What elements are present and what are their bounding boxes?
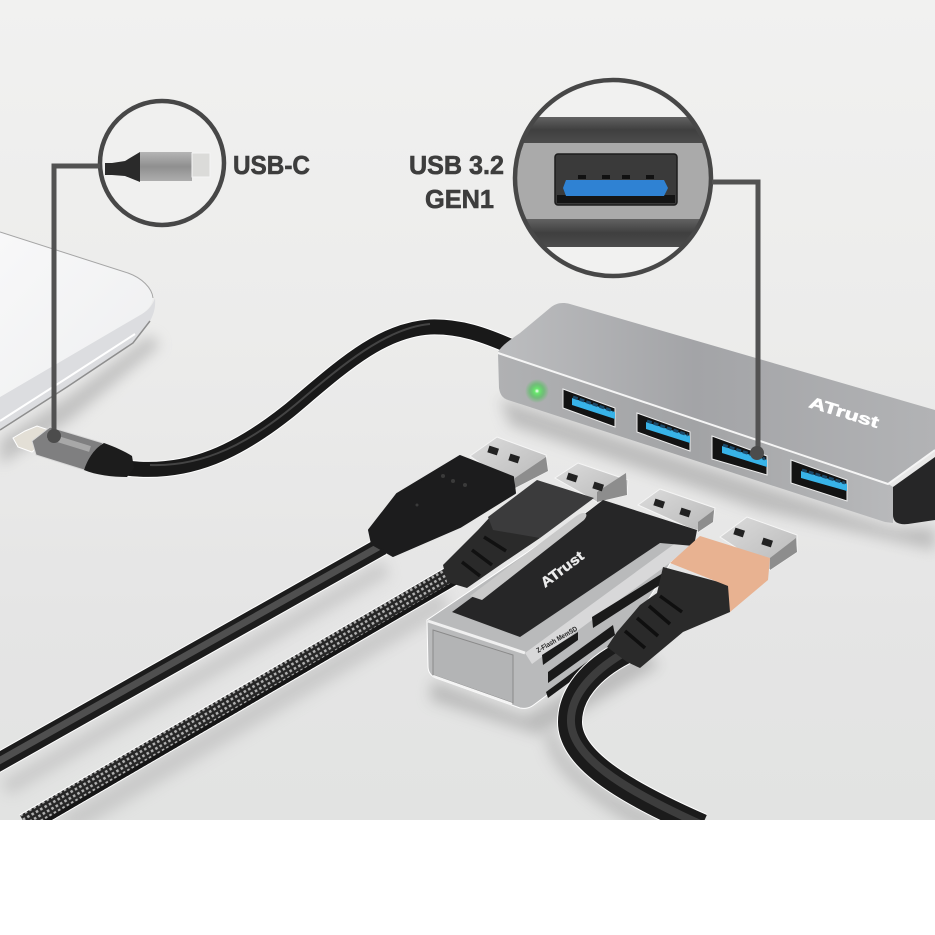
lens connector: [105, 152, 210, 182]
reader side strip: [525, 542, 690, 664]
callout: USB 3.2 lens: [512, 78, 714, 278]
hub port 2: [637, 413, 690, 451]
reader front top edge: [428, 621, 525, 653]
callout: USB-C lens: [100, 101, 224, 225]
reader front face: [433, 630, 513, 703]
hub port 4: [791, 460, 847, 501]
hub front face: [498, 353, 893, 523]
overmold: [369, 456, 515, 556]
USB plug 1 (black): [369, 437, 548, 556]
USB-C connector plug: [13, 426, 134, 477]
status LED: [525, 379, 549, 403]
hub top face: [498, 303, 935, 483]
label: GEN1: GEN1: [425, 184, 494, 214]
reader logo: ATrust: [537, 547, 587, 590]
reader slider highlight: [470, 513, 586, 600]
plain black USB cable: [0, 545, 382, 767]
hub port 3: [712, 436, 767, 475]
laptop corner: [0, 232, 160, 465]
reader card slots: [542, 573, 663, 698]
label: USB-C: USB-C: [233, 150, 310, 180]
slot label: Z-Flash MemSD: [536, 626, 579, 655]
metal tip: [470, 437, 548, 488]
reader metal plug: [638, 489, 715, 532]
card reader: [427, 489, 715, 708]
callout line: USB 3.2: [712, 182, 764, 460]
USB-C cable: [126, 324, 512, 469]
braided USB cable: [25, 574, 455, 831]
label: USB 3.2: USB 3.2: [409, 150, 504, 180]
lens port: [555, 154, 677, 205]
hub port 1: [563, 389, 615, 427]
USB hub: [498, 303, 935, 524]
USB plug 4 (peach): [570, 517, 797, 826]
shadows under devices: [0, 398, 935, 830]
metal tip: [720, 517, 797, 570]
reader body: [427, 503, 697, 708]
hub end cap: [893, 457, 935, 524]
hub logo: ATrust: [807, 395, 882, 432]
peach collar: [670, 536, 770, 612]
reader black top: [452, 500, 697, 637]
strain relief: [607, 567, 730, 668]
curved cable: [570, 652, 702, 826]
callout line: USB-C: [47, 166, 100, 443]
USB plug 2 (braided): [443, 463, 628, 588]
